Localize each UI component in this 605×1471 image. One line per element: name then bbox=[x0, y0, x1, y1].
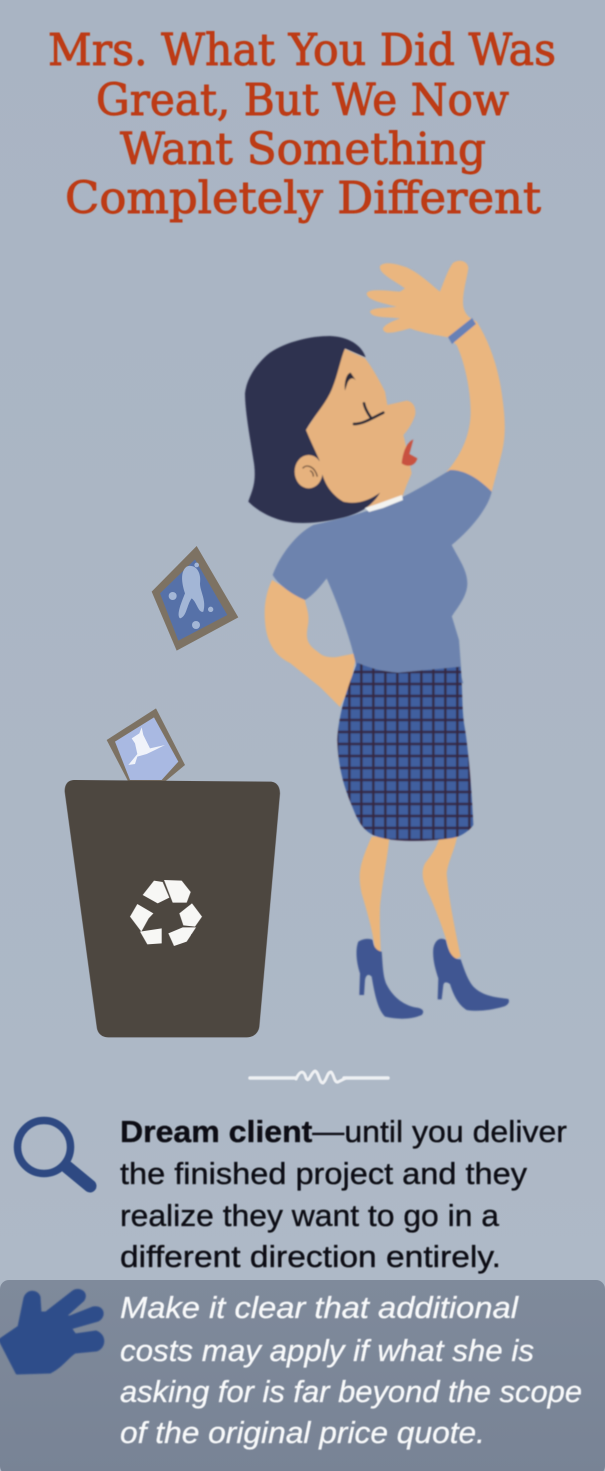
advice text bbox=[120, 1290, 582, 1450]
blouse bbox=[273, 470, 492, 688]
title bbox=[48, 25, 556, 224]
title: Want Something bbox=[120, 124, 486, 175]
hair bbox=[245, 336, 380, 523]
shoes bbox=[357, 939, 509, 1019]
head and face bbox=[245, 336, 417, 523]
picture in bin bbox=[107, 708, 185, 782]
icon: magnifying glass bbox=[18, 1120, 90, 1186]
lips bbox=[402, 439, 417, 466]
recycling symbol bbox=[130, 880, 202, 946]
falling picture bbox=[152, 546, 238, 651]
collar bbox=[365, 495, 403, 512]
description text: different direction entirely. bbox=[120, 1239, 501, 1274]
panel: advice bbox=[0, 1280, 605, 1471]
skirt bbox=[337, 663, 473, 841]
icon: blue glove bbox=[0, 1290, 103, 1373]
left arm on hip bbox=[265, 580, 357, 707]
bracelet bbox=[448, 318, 476, 344]
description text: realize they want to go in a bbox=[120, 1198, 500, 1233]
ear bbox=[295, 455, 323, 488]
title: Completely Different bbox=[65, 173, 541, 224]
face bbox=[306, 348, 415, 508]
description text: Dream client—until you deliver bbox=[120, 1114, 567, 1149]
raised arm and hand bbox=[367, 261, 505, 492]
advice text: of the original price quote. bbox=[120, 1415, 485, 1450]
closed eye bbox=[354, 403, 383, 424]
divider ornament bbox=[250, 1071, 388, 1083]
description text bbox=[120, 1114, 567, 1274]
advice text: Make it clear that additional bbox=[120, 1290, 519, 1325]
title: Great, But We Now bbox=[96, 75, 509, 126]
title: Mrs. What You Did Was bbox=[48, 25, 556, 76]
sleeve and waist fill bbox=[358, 616, 461, 672]
eyebrow bbox=[345, 373, 356, 391]
recycling bin bbox=[65, 780, 280, 1037]
description text: the finished project and they bbox=[120, 1156, 528, 1191]
advice text: costs may apply if what she is bbox=[120, 1333, 534, 1368]
legs bbox=[360, 835, 461, 961]
advice text: asking for is far beyond the scope bbox=[120, 1374, 582, 1409]
illustration: woman bbox=[245, 261, 509, 1019]
